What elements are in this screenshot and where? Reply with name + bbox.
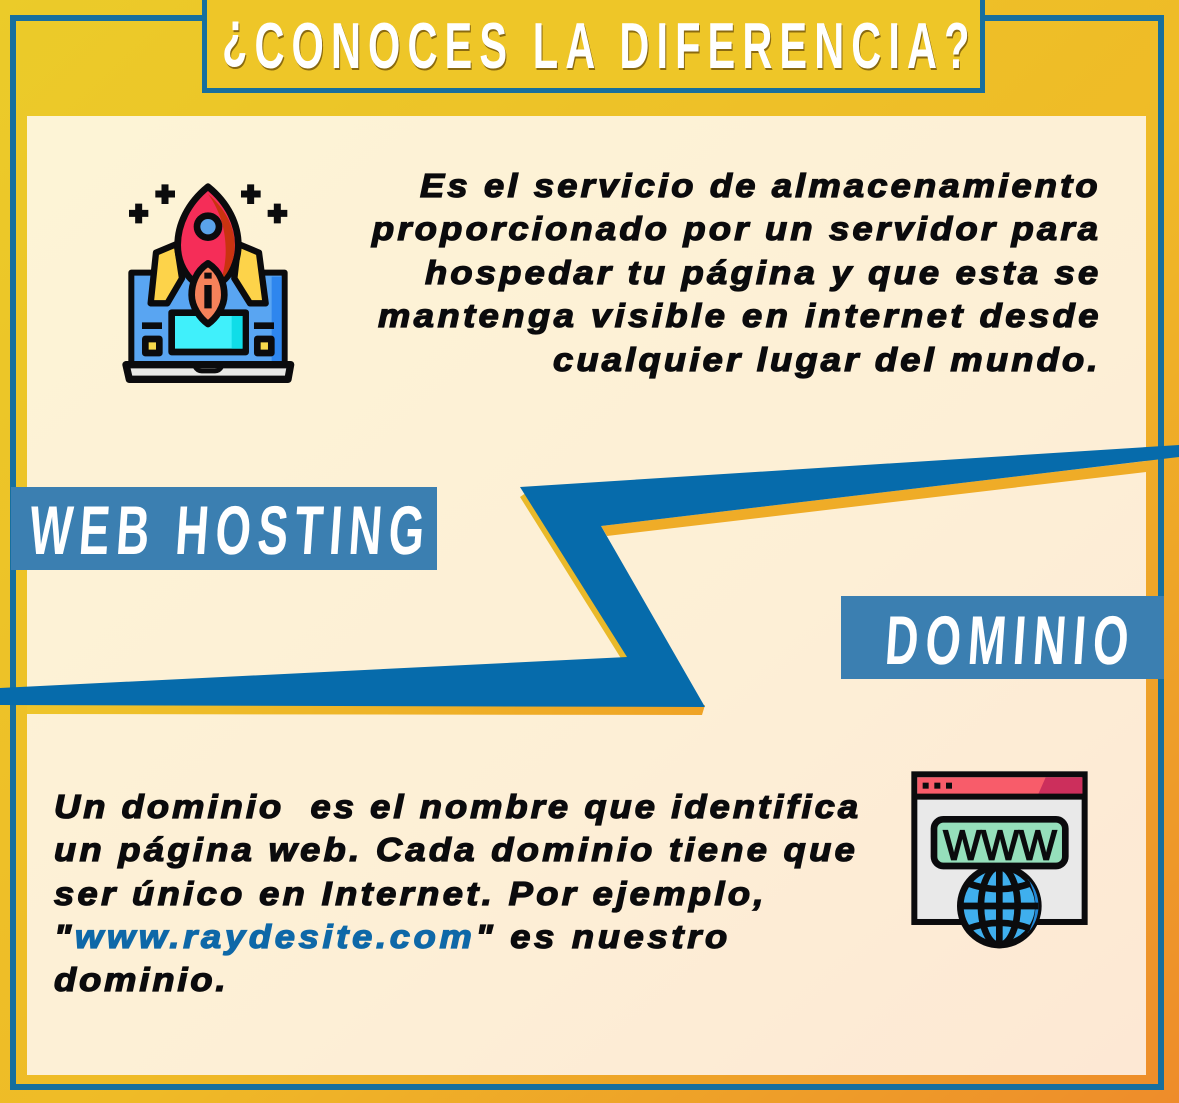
icon part: sparkles (129, 184, 287, 223)
icon part: laptop (126, 273, 291, 379)
text block: dominio description: dominio. (54, 962, 226, 999)
icon: rocket over laptop (126, 184, 291, 379)
icon part: globe (960, 867, 1039, 945)
title banner (204, 0, 982, 90)
text block: dominio description: "www.raydesite.com" es nuestro (54, 919, 727, 956)
text block: web hosting description: cualquier lugar del mundo. (553, 342, 1097, 379)
title: CONOCES LA DIFERENCIA? (254, 10, 970, 82)
icon part: rocket flame (192, 263, 224, 324)
icon: browser window with www and globe (914, 774, 1085, 945)
text block: web hosting description: mantenga visible en internet desde (378, 298, 1099, 335)
icon part: www pill: WWW (943, 821, 1057, 868)
text block: dominio description (54, 789, 858, 999)
text block: web hosting description: proporcionado por un servidor para (371, 211, 1098, 248)
zigzag divider (0, 445, 1179, 715)
text block: web hosting description: hospedar tu página y que esta se (425, 255, 1098, 292)
label: dominio: DOMINIO (883, 603, 1131, 679)
icon part: window (914, 774, 1085, 922)
icon part: rocket fins (151, 244, 266, 303)
text block: web hosting description: Es el servicio de almacenamiento (420, 168, 1098, 205)
text block: dominio description: Un dominio es el nombre que identifica (54, 789, 858, 826)
icon part: rocket window (197, 216, 219, 238)
text block: web hosting description (371, 168, 1099, 379)
label: web hosting: WEB HOSTING (27, 493, 427, 569)
text block: dominio description: ser único en Internet. Por ejemplo, (54, 876, 763, 913)
icon part: rocket body (178, 187, 238, 290)
icon part: info mark (197, 273, 219, 308)
text block: dominio description: un página web. Cada dominio tiene que (54, 832, 855, 869)
